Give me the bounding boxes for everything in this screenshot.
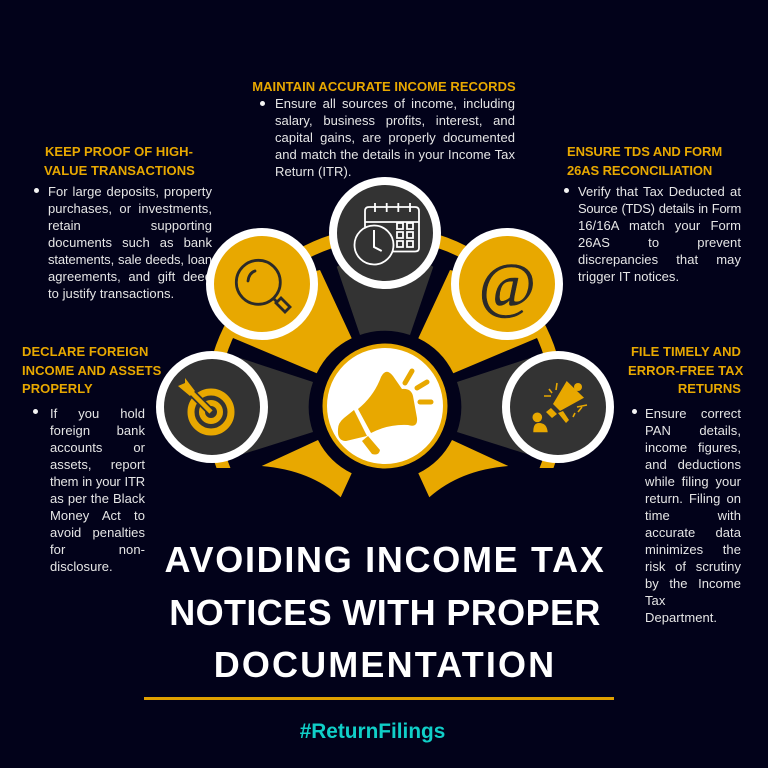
text: TDS reconciliation: Source (TDS) details in Form	[578, 201, 741, 216]
text: file timely: by the Income	[645, 576, 741, 591]
bullet	[260, 101, 265, 106]
text: TDS reconciliation	[578, 184, 741, 284]
heading: TDS reconciliation: 26AS RECONCILIATION	[567, 162, 712, 178]
text: foreign income: as per the Black	[50, 491, 145, 506]
bullet	[33, 409, 38, 414]
text: TDS reconciliation: discrepancies that may	[578, 252, 741, 267]
circle: megaphone and person icon	[506, 355, 610, 459]
circle: calendar icon	[333, 181, 437, 285]
title: AVOIDING INCOME TAX	[164, 539, 605, 580]
text: file timely: return. Filing on	[645, 491, 741, 506]
bullet	[632, 409, 637, 414]
text: foreign income: Money Act to	[50, 508, 145, 523]
panel: file timely and error-free tax returns	[628, 344, 744, 625]
text: TDS reconciliation: trigger IT notices.	[578, 269, 679, 284]
heading: maintain accurate income records: MAINTAIN ACCURATE INCOME RECORDS	[252, 79, 516, 94]
heading: file timely: ERROR-FREE TAX	[628, 362, 743, 378]
bullet	[564, 188, 569, 193]
text: file timely: and deductions	[645, 457, 741, 472]
text: file timely: PAN details,	[645, 423, 741, 438]
text: income records: Return (ITR).	[275, 164, 352, 179]
panel: ensure TDS and Form 26AS reconciliation	[564, 144, 741, 284]
icon: calendar and clock	[354, 203, 419, 264]
heading: declare foreign income	[22, 344, 161, 396]
text: file timely: time with	[645, 508, 741, 523]
heading: keep proof: VALUE TRANSACTIONS	[44, 162, 195, 178]
heading: declare foreign income: INCOME AND ASSETS	[22, 362, 161, 378]
text: file timely: Tax	[645, 593, 665, 608]
text: file timely: Ensure correct	[645, 406, 741, 421]
icon: at sign: @	[478, 252, 536, 320]
panel: keep proof of high-value transactions	[34, 144, 212, 301]
text: high-value proof: For large deposits, property	[48, 184, 212, 199]
text: file timely: accurate data	[645, 525, 741, 540]
icon: magnifier	[236, 260, 290, 312]
text: file timely: income figures,	[645, 440, 741, 455]
text: high-value proof	[48, 184, 212, 301]
heading: file timely	[628, 344, 744, 396]
text: foreign income: for non-	[50, 542, 145, 557]
heading: file timely: RETURNS	[678, 381, 741, 396]
heading: file timely: FILE TIMELY AND	[631, 344, 741, 359]
circle: at sign icon	[455, 232, 559, 336]
heading: declare foreign income: PROPERLY	[22, 381, 93, 396]
text: high-value proof: retain supporting	[48, 218, 212, 233]
text: income records	[275, 96, 515, 179]
text: foreign income: accounts or	[50, 440, 145, 455]
outer arc	[212, 233, 558, 480]
text: high-value proof: statements, sale deeds, loan	[48, 252, 212, 267]
bullet	[34, 188, 39, 193]
text: foreign income: assets, report	[50, 457, 145, 472]
text: TDS reconciliation: 16/16A match your Form	[578, 218, 741, 233]
icon: center megaphone	[338, 371, 431, 454]
text: foreign income: them in your ITR	[50, 474, 145, 489]
wedges	[215, 240, 555, 497]
text: foreign income: foreign bank	[50, 423, 145, 438]
title: NOTICES WITH PROPER	[169, 592, 601, 632]
text: income records: Ensure all sources of income, including	[275, 96, 515, 111]
title: DOCUMENTATION	[214, 644, 556, 685]
heading: TDS reconciliation: ENSURE TDS AND FORM	[567, 144, 722, 159]
panel: maintain accurate income records	[252, 79, 516, 179]
icon: person with megaphone	[532, 381, 587, 432]
heading: declare foreign income: DECLARE FOREIGN	[22, 344, 148, 359]
circle: magnifier icon	[210, 232, 314, 336]
text: high-value proof: to justify transactions.	[48, 286, 174, 301]
text: TDS reconciliation: Verify that Tax Deducted at	[578, 184, 741, 199]
text: foreign income: If you hold	[50, 406, 145, 421]
hub diagram	[156, 177, 614, 498]
text: file timely: while filing your	[645, 474, 741, 489]
icon: target with arrow	[178, 378, 231, 432]
heading: keep proof	[44, 144, 195, 178]
panel: declare foreign income and assets	[22, 344, 161, 574]
circle: target icon	[160, 355, 264, 459]
text: income records: capital gains, are properly documented	[275, 130, 515, 145]
text: file timely: risk of scrutiny	[645, 559, 741, 574]
text: foreign income: avoid penalties	[50, 525, 145, 540]
hashtag: #ReturnFilings	[300, 720, 445, 743]
center circle	[322, 344, 448, 468]
text: foreign income	[50, 406, 145, 574]
text: file timely: Department.	[645, 610, 717, 625]
divider line	[144, 697, 614, 700]
text: income records: salary, business profits, interest, and	[275, 113, 515, 128]
text: income records: and match the details in your Income Tax	[275, 147, 515, 162]
text: high-value proof: agreements, and gift deed	[48, 269, 212, 284]
text: high-value proof: documents such as bank	[48, 235, 212, 250]
text: file timely: minimizes the	[645, 542, 741, 557]
text: high-value proof: purchases, or investments,	[48, 201, 212, 216]
heading: keep proof: KEEP PROOF OF HIGH-	[45, 144, 193, 159]
title	[164, 539, 605, 685]
text: foreign income: disclosure.	[50, 559, 113, 574]
heading: TDS reconciliation	[567, 144, 722, 178]
text: TDS reconciliation: 26AS to prevent	[578, 235, 741, 250]
text: file timely	[645, 406, 741, 625]
